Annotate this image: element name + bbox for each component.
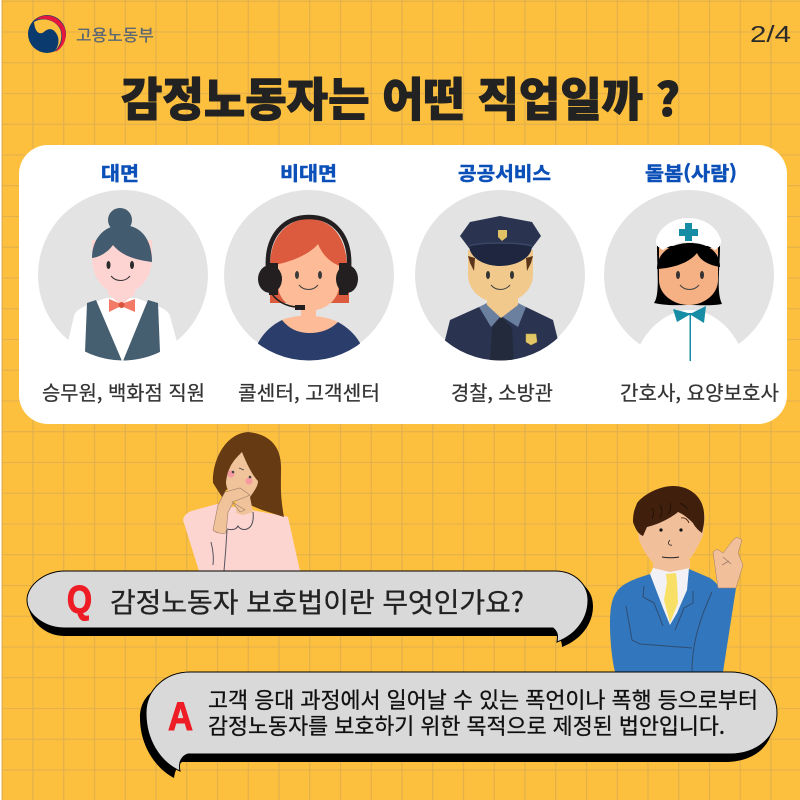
heading: 비대면 xyxy=(280,159,337,186)
label: 승무원, 백화점 직원 xyxy=(42,377,205,406)
bubble shadow xyxy=(27,576,593,647)
bubble body xyxy=(146,672,777,771)
title: 감정노동자는 어떤 직업일까 ? xyxy=(121,64,680,130)
answer text: 고객 응대 과정에서 일어날 수 있는 폭언이나 폭행 등으로부터 xyxy=(208,683,758,715)
circle illustration: nurse xyxy=(604,190,774,365)
logo: Ministry of Employment and Labor xyxy=(28,15,154,53)
bubble body xyxy=(27,571,588,642)
circle illustration: call centre agent xyxy=(224,190,394,365)
label: 경찰, 소방관 xyxy=(451,377,553,406)
icon: taegeuk emblem xyxy=(28,15,66,53)
answer text: 감정노동자를 보호하기 위한 목적으로 제정된 법안입니다. xyxy=(208,709,725,741)
circle illustration: flight attendant xyxy=(38,190,208,365)
label: 간호사, 요양보호사 xyxy=(620,377,779,406)
Q mark: Q xyxy=(67,579,92,622)
heading: 공공서비스 xyxy=(458,159,551,186)
A mark: A xyxy=(168,695,193,739)
column: care xyxy=(604,159,779,406)
illustration: thinking woman xyxy=(183,432,300,571)
panel: occupations xyxy=(19,145,787,424)
page number: 2/4 xyxy=(750,21,791,47)
ministry name: 고용노동부 xyxy=(76,22,154,46)
answer text xyxy=(208,683,758,741)
column: face to face xyxy=(38,159,208,406)
speech bubble: question xyxy=(27,571,593,647)
column: non face to face xyxy=(224,159,394,406)
illustration: man pointing up xyxy=(610,486,743,672)
bubble shadow xyxy=(140,680,773,778)
heading: 돌봄(사람) xyxy=(645,159,737,186)
heading: 대면 xyxy=(101,159,139,186)
question text: 감정노동자 보호법이란 무엇인가요? xyxy=(110,580,524,620)
column: public service xyxy=(415,159,585,406)
circle illustration: police officer xyxy=(415,190,585,365)
label: 콜센터, 고객센터 xyxy=(238,377,380,406)
speech bubble: answer xyxy=(140,672,777,778)
